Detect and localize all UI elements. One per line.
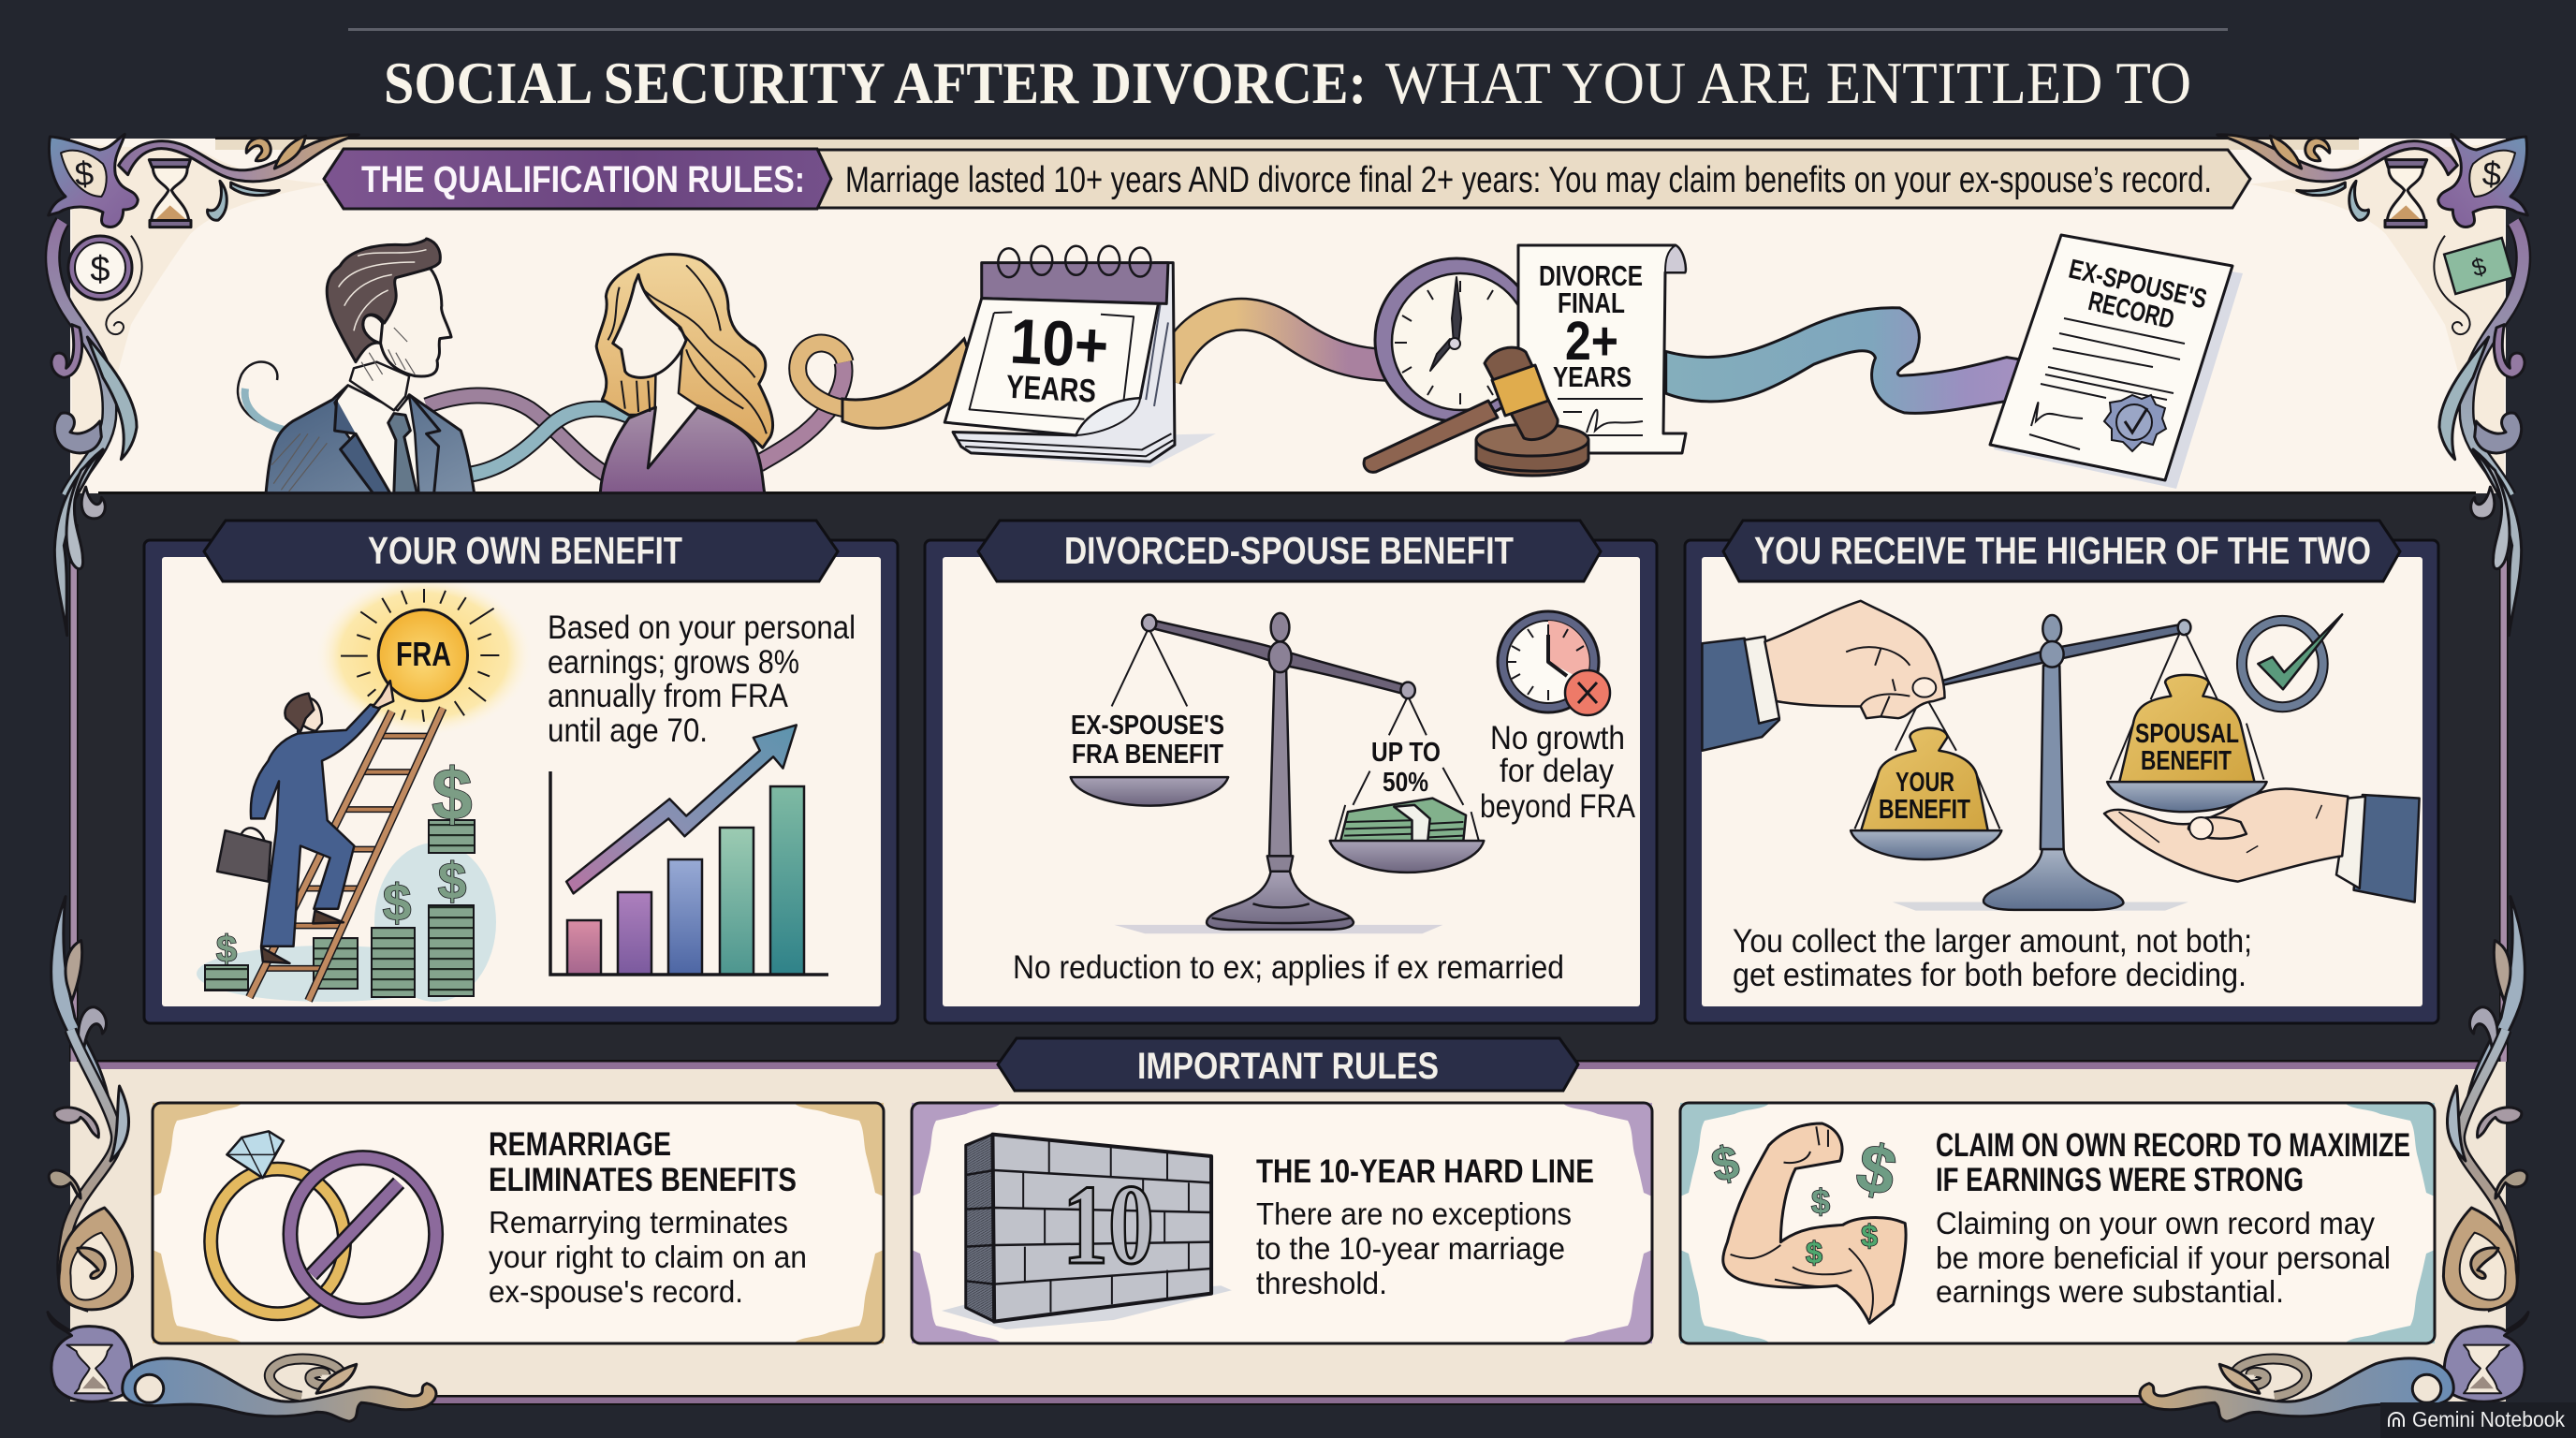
illustration: ex-spouse's record document xyxy=(1990,235,2243,489)
illustration: divorce final decree scroll: DIVORCE xyxy=(1539,259,1643,292)
text: claim title xyxy=(1936,1127,2410,1198)
illustration: ribbons between couple xyxy=(238,315,1395,475)
heading: important rules xyxy=(998,1038,1578,1091)
panel frame xyxy=(1685,540,2438,1023)
text: hard line body: There are no exceptions xyxy=(1256,1196,1572,1231)
text: remarriage body: Remarrying terminates xyxy=(489,1205,788,1240)
heading: important rules: IMPORTANT RULES xyxy=(1137,1046,1439,1087)
icon: flexed arm with dollars: $ xyxy=(1851,1130,1902,1211)
text: no growth for delay: beyond FRA xyxy=(1480,788,1636,825)
text: remarriage body: your right to claim on an xyxy=(489,1240,807,1274)
card body xyxy=(153,1103,884,1343)
illustration: divorce final decree scroll: 2+ xyxy=(1565,311,1618,372)
illustration: ex-spouse's record document: EX-SPOUSE'S xyxy=(2066,255,2209,315)
illustration: man climbing xyxy=(217,681,393,963)
icon: stone wall with 10 xyxy=(942,1135,1232,1329)
text: hard line body: threshold. xyxy=(1256,1266,1387,1300)
label: up to 50%: 50% xyxy=(1383,768,1428,798)
text: own benefit description: until age 70. xyxy=(548,712,708,749)
header tab: YOUR OWN BENEFIT xyxy=(368,529,682,572)
panel: important rules background xyxy=(70,1060,2506,1405)
ornament: left vines xyxy=(51,449,110,1105)
panel body xyxy=(162,557,881,1006)
icon: flexed arm with dollars: $ xyxy=(1707,1136,1744,1192)
icon: banknote xyxy=(2444,238,2513,294)
ornament: top-left corner: $ xyxy=(73,154,95,194)
icon: flexed arm with dollars: $ xyxy=(1861,1219,1878,1253)
text: no growth for delay xyxy=(1480,720,1636,825)
text: no reduction to ex: No reduction to ex; applies if ex remarried xyxy=(1013,949,1564,986)
ornament: right vines xyxy=(2466,449,2525,1105)
text: remarriage body: ex-spouse's record. xyxy=(489,1274,743,1309)
text: claim title: IF EARNINGS WERE STRONG xyxy=(1936,1162,2304,1198)
text: claim body xyxy=(1936,1206,2391,1309)
text: claim body: earnings were substantial. xyxy=(1936,1274,2284,1309)
panel frame xyxy=(925,540,1657,1023)
icon: stone wall with 10: 10 xyxy=(1062,1162,1154,1288)
text: claim title: CLAIM ON OWN RECORD TO MAXIMIZE xyxy=(1936,1127,2410,1164)
text: remarriage title: ELIMINATES BENEFITS xyxy=(489,1162,797,1198)
illustration: flowing ribbon to record xyxy=(1666,308,2040,413)
illustration: balance scale xyxy=(1071,613,1484,933)
panel: divorced-spouse benefit xyxy=(925,521,1657,1023)
illustration: money stacks: $ xyxy=(438,852,466,910)
text: own benefit description: earnings; grows 8% xyxy=(548,644,799,681)
illustration: ladder xyxy=(249,708,443,1001)
illustration: divorce final decree scroll xyxy=(1518,245,1686,453)
text: hard line body xyxy=(1256,1196,1572,1300)
label: up to 50%: UP TO xyxy=(1371,738,1441,768)
card: remarriage eliminates benefits xyxy=(153,1103,884,1343)
icon: flexed arm with dollars xyxy=(1707,1123,1906,1323)
illustration: divorce final decree scroll: FINAL xyxy=(1558,286,1625,319)
icon: banknote: $ xyxy=(2468,251,2490,282)
panel frame xyxy=(144,540,898,1023)
icon: flexed arm with dollars: $ xyxy=(1806,1236,1822,1269)
illustration: money stacks: $ xyxy=(216,929,237,970)
banner: rule text strip: Marriage lasted 10+ years AND divorce final 2+ years: You may claim benefits on your ex-spouse’s record. xyxy=(845,160,2212,200)
card: the 10-year hard line xyxy=(912,1103,1652,1343)
panel body xyxy=(1702,557,2422,1006)
illustration: 10+ years calendar: YEARS xyxy=(1005,369,1097,410)
panel: central dark section xyxy=(69,492,2509,1062)
label: spousal benefit weight: SPOUSAL xyxy=(2135,719,2239,749)
label: FRA: FRA xyxy=(396,635,451,673)
icon: crossed wedding ring xyxy=(211,1131,436,1313)
ornament: bottom-left corner xyxy=(48,1030,436,1421)
illustration: 10+ years calendar xyxy=(944,246,1216,467)
text: collect the larger amount: get estimates for both before deciding. xyxy=(1733,957,2247,993)
panel: you receive the higher of the two xyxy=(1685,521,2438,1023)
label: ex-spouse's FRA benefit: EX-SPOUSE'S xyxy=(1071,711,1224,741)
panel body xyxy=(943,557,1640,1006)
icon: pocket watch with dollar: $ xyxy=(90,250,110,289)
header tab xyxy=(1723,521,2400,581)
icon: pocket watch with dollar xyxy=(68,236,132,300)
label: your benefit weight: BENEFIT xyxy=(1879,795,1970,825)
watermark: Gemini Notebook xyxy=(2380,1402,2576,1438)
text: hard line title: THE 10-YEAR HARD LINE xyxy=(1256,1153,1594,1190)
illustration: money stacks: $ xyxy=(383,873,411,932)
title: SOCIAL SECURITY AFTER DIVORCE: xyxy=(384,50,1367,116)
text: own benefit description: annually from FRA xyxy=(548,678,789,714)
text: own benefit description xyxy=(548,609,856,749)
bar chart: growing benefit xyxy=(550,725,828,975)
illustration: divorce final decree scroll: YEARS xyxy=(1553,360,1632,393)
card: claim on own record xyxy=(1680,1103,2435,1343)
text: hard line body: to the 10-year marriage xyxy=(1256,1231,1565,1266)
ornament: top-right corner: $ xyxy=(2481,154,2503,194)
ornament: top-right corner xyxy=(2217,134,2527,496)
label: your benefit weight: YOUR xyxy=(1895,768,1954,798)
qualification rules banner xyxy=(324,149,2250,209)
icon: clock with cross xyxy=(1498,611,1610,715)
illustration: hands weighing benefits on scale xyxy=(1702,601,2420,911)
text: no growth for delay: No growth xyxy=(1490,720,1625,756)
label: your benefit weight xyxy=(1879,768,1970,825)
text: own benefit description: Based on your personal xyxy=(548,609,856,646)
banner: rule text strip xyxy=(805,150,2250,208)
ornament: top-left corner xyxy=(49,134,359,496)
text: collect the larger amount xyxy=(1733,923,2252,993)
illustration: 10+ years calendar: 10+ xyxy=(1008,305,1110,382)
illustration: clock xyxy=(1375,258,1538,421)
label: ex-spouse's FRA benefit: FRA BENEFIT xyxy=(1072,740,1223,770)
watermark: Gemini Notebook: Gemini Notebook xyxy=(2412,1407,2565,1431)
panel: qualification rules background xyxy=(70,137,2506,494)
illustration: money stacks: $ xyxy=(432,753,473,835)
label: up to 50% xyxy=(1371,738,1441,798)
arrow: upward trend xyxy=(566,725,797,893)
text: no growth for delay: for delay xyxy=(1500,753,1614,789)
header tab: YOU RECEIVE THE HIGHER OF THE TWO xyxy=(1754,529,2371,572)
title xyxy=(384,50,2191,116)
header tab xyxy=(204,521,838,581)
label: ex-spouse's FRA benefit xyxy=(1071,711,1224,770)
illustration: gavel and block xyxy=(1364,347,1588,476)
card body xyxy=(1680,1103,2435,1343)
text: claim body: be more beneficial if your personal xyxy=(1936,1240,2391,1275)
title: WHAT YOU ARE ENTITLED TO xyxy=(1385,50,2191,116)
header tab: DIVORCED-SPOUSE BENEFIT xyxy=(1064,529,1514,572)
banner: purple label: THE QUALIFICATION RULES: xyxy=(361,159,805,200)
text: claim body: Claiming on your own record may xyxy=(1936,1206,2375,1240)
illustration: woman with long hair xyxy=(596,255,773,493)
illustration: man in suit xyxy=(266,239,475,493)
text: collect the larger amount: You collect the larger amount, not both; xyxy=(1733,923,2252,960)
text: remarriage body xyxy=(489,1205,807,1309)
illustration: FRA sun xyxy=(316,576,532,735)
banner: purple label xyxy=(324,149,831,209)
text: remarriage title xyxy=(489,1126,797,1198)
card body xyxy=(912,1103,1652,1343)
icon: flexed arm with dollars: $ xyxy=(1811,1182,1830,1221)
panel: your own benefit xyxy=(144,521,898,1023)
illustration: ex-spouse's record document: RECORD xyxy=(2086,286,2177,335)
ornament: bottom-right corner xyxy=(2140,1030,2528,1421)
text: remarriage title: REMARRIAGE xyxy=(489,1126,671,1163)
label: spousal benefit weight xyxy=(2135,719,2239,776)
illustration: money stacks xyxy=(197,753,496,1002)
header tab xyxy=(978,521,1601,581)
label: spousal benefit weight: BENEFIT xyxy=(2141,746,2232,776)
